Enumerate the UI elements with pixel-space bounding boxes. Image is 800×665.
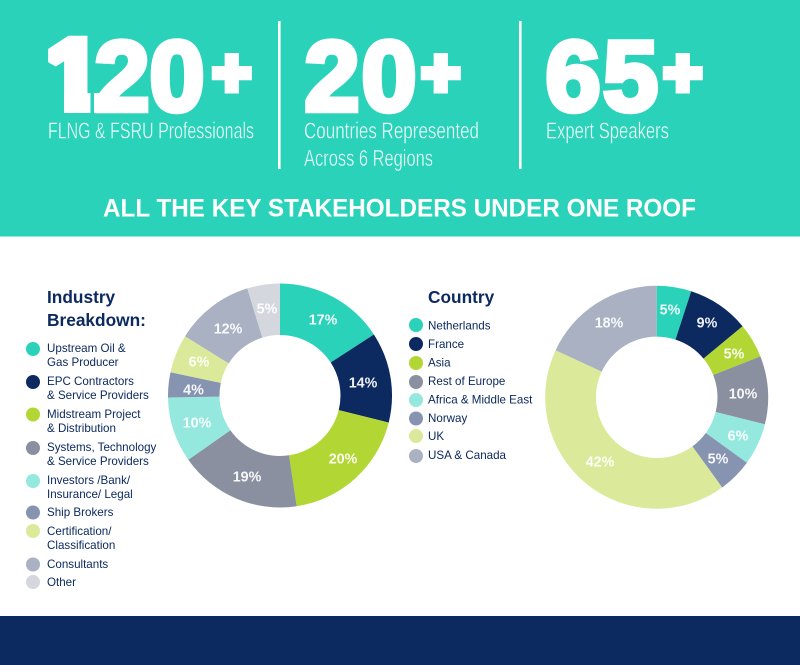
stat: 120+: 1 xyxy=(46,20,100,129)
panel: header statistics xyxy=(0,0,800,236)
legend item: Africa & Middle East: Africa & Middle East xyxy=(428,394,533,406)
divider 1 xyxy=(278,21,281,169)
legend item: consultants xyxy=(26,558,108,572)
footer bar xyxy=(0,616,800,665)
legend item: Netherlands xyxy=(409,318,491,332)
slice: Rest of Europe 10%: 10% xyxy=(729,386,758,402)
legend item: upstream xyxy=(26,342,126,369)
slice: midstream 20%: 20% xyxy=(329,452,358,468)
legend item: USA & Canada: USA & Canada xyxy=(428,449,507,462)
slice: Asia 5% xyxy=(704,326,760,375)
stat: 65+: + xyxy=(664,35,702,109)
stat label: professionals: FLNG & FSRU Professionals xyxy=(48,118,254,144)
slice: EPC 14%: 14% xyxy=(349,376,378,392)
stat label: countries: Countries Represented xyxy=(304,118,479,144)
slice: France 9%: 9% xyxy=(697,316,718,332)
legend item: EPC xyxy=(26,375,149,402)
slice: France 9% xyxy=(676,291,743,359)
legend item: EPC: & Service Providers xyxy=(47,389,149,402)
slice: certification 6% xyxy=(170,336,229,383)
slice: consultants 12%: 12% xyxy=(214,322,243,338)
legend item: upstream: Gas Producer xyxy=(47,356,119,369)
legend item: EPC: EPC Contractors xyxy=(47,375,134,388)
chart: industry donut xyxy=(168,284,392,507)
legend item: investors: Insurance/ Legal xyxy=(47,488,133,501)
slice: Norway 5%: 5% xyxy=(708,452,729,468)
slice: Netherlands 5% xyxy=(657,286,691,340)
heading: industry breakdown: Breakdown: xyxy=(47,310,146,330)
legend item: France: France xyxy=(428,338,464,351)
stat: 120+: + xyxy=(212,35,251,109)
legend item: Norway xyxy=(409,412,468,426)
stat: 120+: 20 xyxy=(94,20,205,132)
stat: 65+: 65 xyxy=(546,20,658,132)
legend item: midstream: Midstream Project xyxy=(47,408,141,421)
stat label: countries xyxy=(304,118,479,171)
slice: Africa & Middle East 6%: 6% xyxy=(728,428,749,444)
slice: upstream 17% xyxy=(280,284,374,363)
slice: certification 6%: 6% xyxy=(189,354,210,370)
legend item: ship brokers: Ship Brokers xyxy=(47,506,114,519)
legend item: midstream xyxy=(26,408,141,435)
legend item: Asia xyxy=(409,356,451,370)
legend item: other xyxy=(26,575,76,589)
stat: 20+: 20 xyxy=(304,20,417,132)
legend item: UK xyxy=(409,429,444,443)
slice: consultants 12% xyxy=(185,288,262,363)
heading: country: Country xyxy=(428,287,495,307)
slice: ship brokers 4% xyxy=(168,372,221,398)
slice: investors 10% xyxy=(168,397,230,460)
slice: USA & Canada 18%: 18% xyxy=(595,316,624,332)
legend item: consultants: Consultants xyxy=(47,558,108,571)
stat label: countries: Across 6 Regions xyxy=(304,145,433,171)
legend item: other: Other xyxy=(47,576,76,589)
slice: EPC 14% xyxy=(331,334,392,423)
slice: other 5% xyxy=(247,284,280,338)
legend item: Asia: Asia xyxy=(428,356,451,370)
slice: Rest of Europe 10% xyxy=(713,356,768,424)
legend item: upstream: Upstream Oil & xyxy=(47,342,126,355)
slice: Africa & Middle East 6% xyxy=(706,412,765,463)
legend item: Rest of Europe: Rest of Europe xyxy=(428,375,505,388)
slice: investors 10%: 10% xyxy=(183,416,212,432)
chart: country donut xyxy=(545,286,768,509)
slice: systems 19% xyxy=(188,430,297,507)
panel: industry legend xyxy=(26,287,157,589)
slice: Norway 5% xyxy=(692,433,747,488)
panel: country legend xyxy=(409,287,533,463)
slice: UK 42% xyxy=(545,350,722,509)
legend item: systems xyxy=(26,441,157,468)
legend item: systems: & Service Providers xyxy=(47,455,149,468)
slice: systems 19%: 19% xyxy=(233,470,262,486)
slice: USA & Canada 18% xyxy=(556,286,657,372)
legend item: Netherlands: Netherlands xyxy=(428,320,491,332)
legend item: France xyxy=(409,337,464,351)
legend item: investors: Investors /Bank/ xyxy=(47,474,131,487)
legend item: midstream: & Distribution xyxy=(47,422,116,435)
slice: Asia 5%: 5% xyxy=(724,346,745,362)
divider 2 xyxy=(519,21,522,169)
slice: UK 42%: 42% xyxy=(586,454,615,470)
legend item: certification xyxy=(26,524,115,552)
heading: industry breakdown: Industry xyxy=(47,287,116,307)
slice: Netherlands 5%: 5% xyxy=(660,302,681,318)
legend item: certification: Classification xyxy=(47,539,115,552)
legend item: investors xyxy=(26,474,133,501)
stat: 20+: + xyxy=(422,35,460,109)
slice: ship brokers 4%: 4% xyxy=(183,382,204,398)
slice: upstream 17%: 17% xyxy=(309,312,338,328)
slice: other 5%: 5% xyxy=(257,302,278,318)
legend item: systems: Systems, Technology xyxy=(47,441,157,454)
stat label: speakers: Expert Speakers xyxy=(546,118,669,144)
legend item: Norway: Norway xyxy=(428,412,468,425)
legend item: certification: Certification/ xyxy=(47,525,112,538)
heading: ALL THE KEY STAKEHOLDERS UNDER ONE ROOF xyxy=(103,194,696,222)
slice: midstream 20% xyxy=(289,410,389,506)
legend item: UK: UK xyxy=(428,430,444,443)
